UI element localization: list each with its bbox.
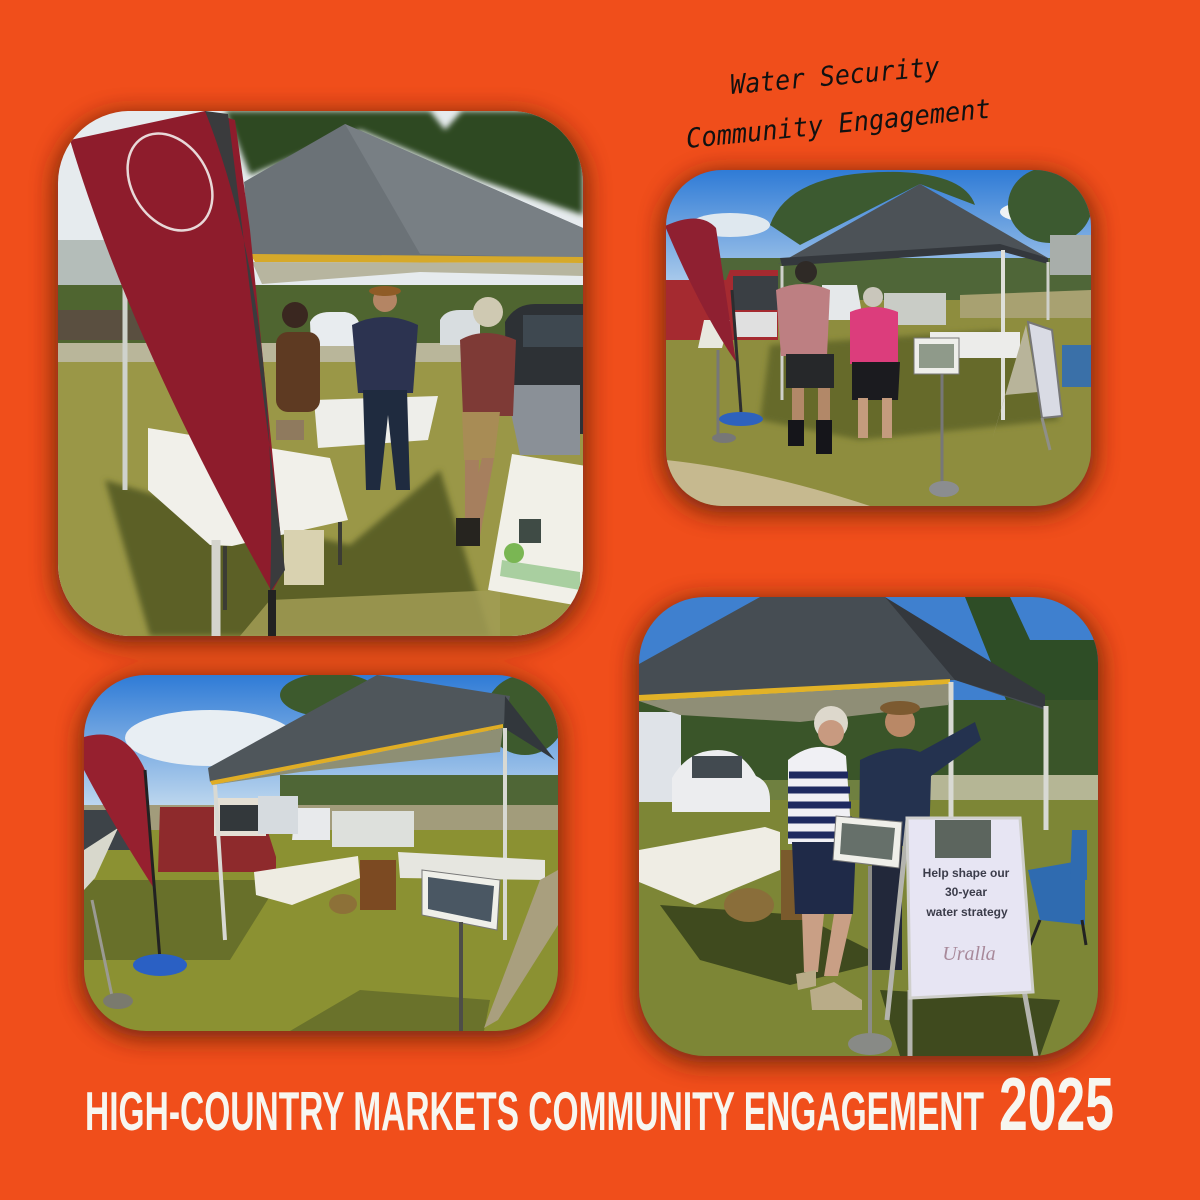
poster: help shape our 30-year water strategy: water strategy xyxy=(925,905,1008,919)
red car xyxy=(666,270,778,340)
photo shadows xyxy=(56,115,1100,1062)
person left xyxy=(776,261,834,454)
canopy xyxy=(208,675,510,782)
a-frame xyxy=(992,322,1062,450)
poster: help shape our 30-year water strategy: Help shape our xyxy=(923,866,1010,880)
canopy xyxy=(244,124,583,258)
canopy xyxy=(639,597,1045,710)
feather flag xyxy=(665,218,736,362)
cars xyxy=(310,312,361,346)
title year: 2025 xyxy=(999,1062,1114,1146)
photo: stall with flag and people talking xyxy=(58,111,586,636)
sign on stand xyxy=(833,816,902,1055)
poster xyxy=(488,454,586,607)
tent and car xyxy=(639,712,681,802)
poster: help shape our 30-year water strategy: 30-year xyxy=(945,885,987,899)
backdrop panel xyxy=(332,811,414,847)
chair xyxy=(1028,830,1087,945)
left signage xyxy=(84,828,118,890)
person right xyxy=(850,287,900,438)
handwritten heading: Community Engagement: Community Engagement xyxy=(685,94,992,155)
back panel and table xyxy=(884,293,946,325)
poster: help shape our 30-year water strategy: Uralla xyxy=(942,943,996,965)
feather flag xyxy=(70,111,284,592)
small sign xyxy=(698,320,736,443)
person centre xyxy=(352,286,418,490)
canopy xyxy=(778,184,1048,264)
handwritten heading: Water Security: Water Security xyxy=(729,52,941,101)
grass xyxy=(58,362,583,636)
sign on stand xyxy=(914,338,959,497)
a-frame xyxy=(484,870,558,1028)
man in stripes xyxy=(788,706,862,1010)
photo: wide view of stall xyxy=(84,673,565,1031)
person left xyxy=(276,302,320,440)
vehicles xyxy=(158,807,276,872)
table xyxy=(639,827,780,905)
poster: help shape our 30-year water strategy xyxy=(887,818,1036,1056)
tables xyxy=(254,856,360,905)
photo: visitors at stall with banner xyxy=(665,167,1092,506)
person right xyxy=(456,297,516,546)
sign on stand xyxy=(422,870,500,1031)
trees xyxy=(225,111,583,215)
man in navy xyxy=(859,701,981,970)
tables xyxy=(314,396,438,448)
photo: visitors with water strategy poster xyxy=(639,597,1098,1056)
feather flag xyxy=(84,734,155,890)
